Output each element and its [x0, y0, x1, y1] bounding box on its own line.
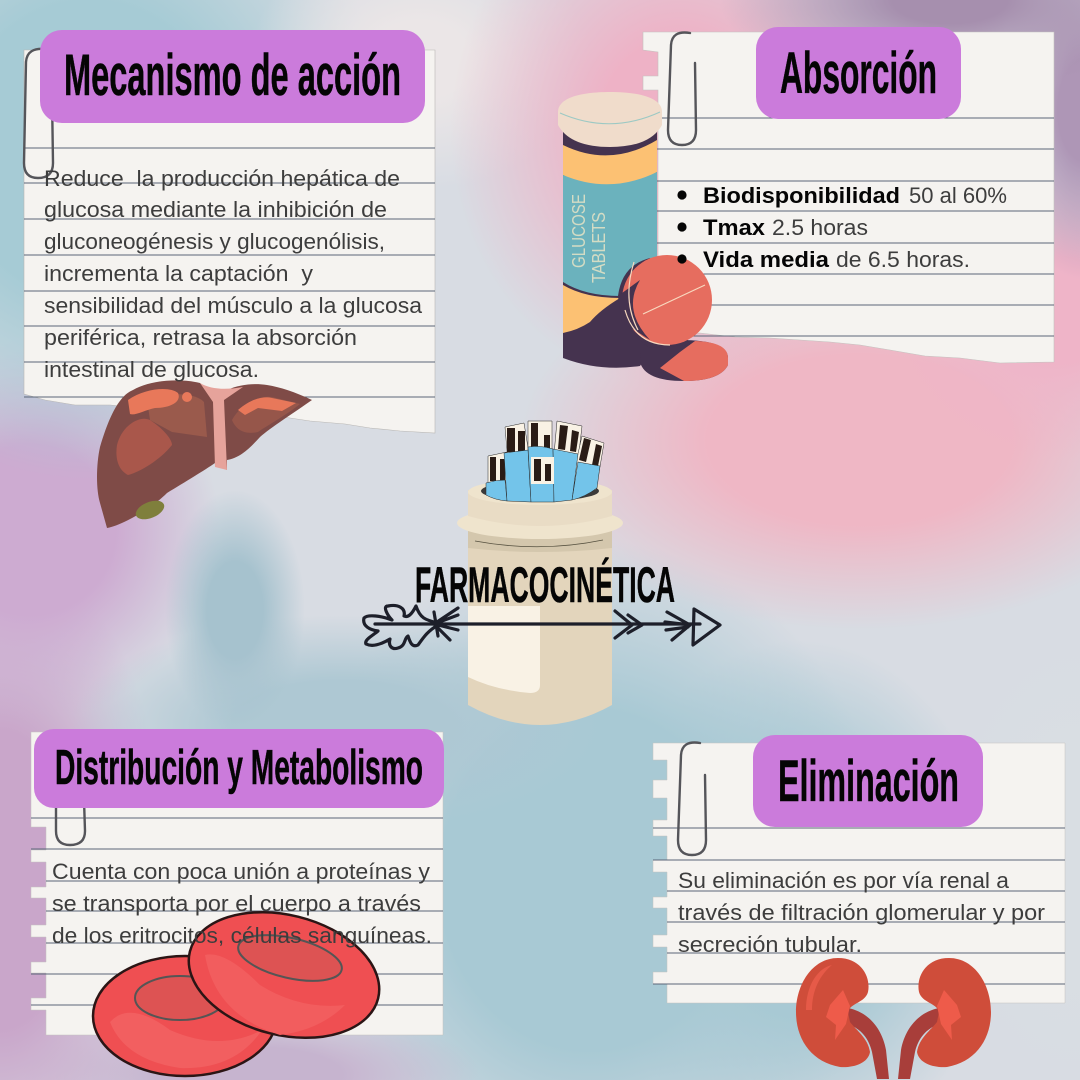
jar label: GLUCOSE [569, 194, 589, 268]
body text: Cuenta con poca unión a proteínas y [52, 859, 430, 884]
main title: farmacocinética: FARMACOCINÉTICA [415, 557, 675, 613]
body text: Su eliminación es por vía renal a [678, 868, 1010, 893]
title box [40, 30, 425, 123]
body text: periférica, retrasa la absorción [44, 325, 357, 350]
jar label: TABLETS [589, 212, 609, 283]
bullet list: de 6.5 horas. [836, 247, 970, 272]
body text: gluconeogénesis y glucogenólisis, [44, 229, 385, 254]
paperclip [56, 800, 85, 845]
paperclip [24, 49, 53, 178]
torn paper sheet [653, 743, 1065, 1003]
arrow [364, 605, 720, 649]
body text: secreción tubular. [678, 932, 862, 957]
body text: se transporta por el cuerpo a través [52, 891, 421, 916]
body text [678, 868, 1045, 957]
icon: kidneys [796, 958, 991, 1079]
body text [52, 859, 432, 948]
icon: red blood cells [93, 893, 393, 1076]
title text: Absorción [780, 41, 937, 106]
bullet list [677, 183, 1007, 272]
title box [34, 729, 444, 808]
bullet list: Vida media [703, 247, 830, 272]
paperclip [678, 742, 706, 855]
panel: mecanismo de acción [24, 30, 435, 528]
body text: sensibilidad del músculo a la glucosa [44, 293, 423, 318]
bullet list: Tmax [703, 215, 766, 240]
bullet list: Biodisponibilidad [703, 183, 900, 208]
title box [753, 735, 983, 827]
torn paper sheet [643, 32, 1054, 363]
torn paper sheet [31, 732, 443, 1035]
panel: distribución y metabolismo [31, 729, 444, 1076]
body text: intestinal de glucosa. [44, 357, 259, 382]
body text: glucosa mediante la inhibición de [44, 197, 387, 222]
body text: incrementa la captación y [44, 261, 313, 286]
icon: glucose tablets jar [558, 92, 728, 381]
panel: eliminación [653, 735, 1065, 1079]
body text: Reduce la producción hepática de [44, 166, 400, 191]
icon: liver [97, 380, 312, 528]
body text: de los eritrocitos, células sanguíneas. [52, 923, 432, 948]
right kidney [898, 958, 991, 1079]
torn paper sheet [24, 50, 435, 433]
panel: absorción [558, 27, 1054, 381]
title box [756, 27, 961, 119]
test strips [486, 421, 604, 502]
title text: Mecanismo de acción [64, 43, 401, 108]
paperclip [668, 32, 696, 145]
jar label [569, 194, 609, 283]
bullet list: 2.5 horas [772, 215, 868, 240]
bullet list: 50 al 60% [909, 183, 1007, 208]
center: pill bottle [457, 421, 623, 725]
title text: Distribución y Metabolismo [55, 741, 423, 795]
body text [44, 166, 423, 382]
body text: través de filtración glomerular y por [678, 900, 1045, 925]
left kidney [796, 958, 889, 1079]
